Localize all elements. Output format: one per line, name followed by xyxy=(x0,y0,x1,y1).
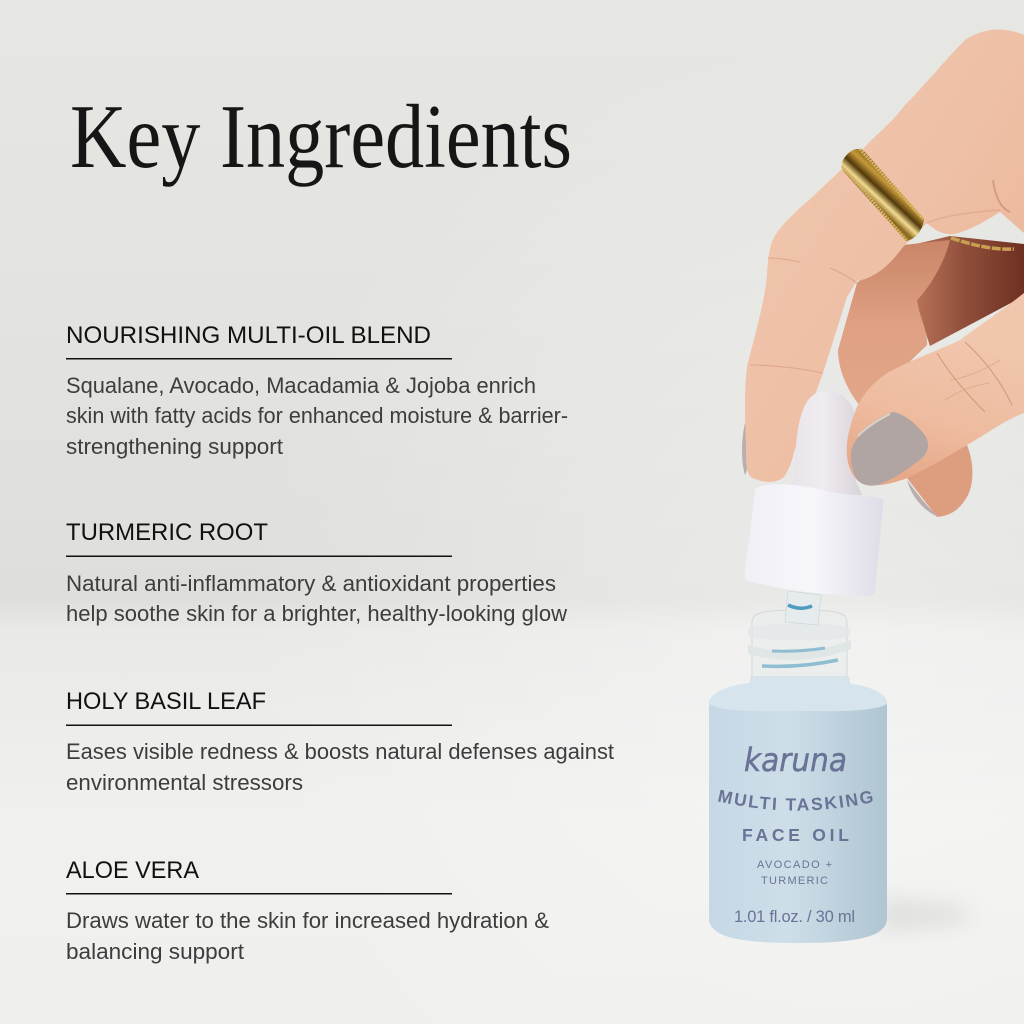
lower finger xyxy=(907,445,972,517)
thumbnail highlight xyxy=(858,414,890,436)
title: Key Ingredients xyxy=(70,86,572,187)
thumb shape xyxy=(847,293,1024,485)
second ring xyxy=(951,238,1014,249)
bottle body xyxy=(709,680,887,943)
dropper tube xyxy=(785,591,821,625)
body: nourishing multi-oil blend xyxy=(66,373,568,459)
dropper bulb xyxy=(782,391,862,495)
brand logo: karuna xyxy=(744,741,847,779)
body: turmeric root: help soothe skin for a brighter, healthy-looking glow xyxy=(66,601,567,626)
heading: turmeric root: TURMERIC ROOT xyxy=(66,519,268,546)
index fingernail xyxy=(742,423,748,475)
body: aloe vera xyxy=(66,908,549,964)
thumb creases xyxy=(937,342,1012,412)
body: nourishing multi-oil blend: strengthening support xyxy=(66,434,283,459)
body: aloe vera: balancing support xyxy=(66,939,244,964)
body: nourishing multi-oil blend: Squalane, Avocado, Macadamia & Jojoba enrich xyxy=(66,373,536,398)
hand: thumb xyxy=(847,293,1024,486)
dropper collar xyxy=(745,484,884,596)
shadowed fingers behind xyxy=(903,236,1024,346)
product bottle xyxy=(709,590,887,943)
section: aloe vera xyxy=(66,857,549,964)
product name: MULTI TASKING xyxy=(718,790,873,811)
heading: holy basil leaf: HOLY BASIL LEAF xyxy=(66,688,266,715)
body: holy basil leaf xyxy=(66,739,614,795)
bottle shadow xyxy=(880,897,975,934)
body: aloe vera: Draws water to the skin for increased hydration & xyxy=(66,908,549,933)
body: holy basil leaf: environmental stressors xyxy=(66,770,303,795)
thumbnail xyxy=(851,412,928,486)
section: nourishing multi-oil blend xyxy=(66,322,568,459)
dropper cap xyxy=(745,391,884,596)
hand: palm and fingers xyxy=(742,30,1024,517)
heading: nourishing multi-oil blend: NOURISHING MULTI-OIL BLEND xyxy=(66,322,431,349)
middle finger xyxy=(838,240,950,408)
body: turmeric root: Natural anti-inflammatory & antioxidant properties xyxy=(66,571,556,596)
product name xyxy=(718,790,873,845)
back of hand and index finger xyxy=(745,30,1024,482)
volume: 1.01 fl.oz. / 30 ml xyxy=(734,908,855,926)
heading: aloe vera: ALOE VERA xyxy=(66,857,200,884)
body: nourishing multi-oil blend: skin with fatty acids for enhanced moisture & barrier- xyxy=(66,403,568,428)
body: turmeric root xyxy=(66,571,567,626)
bottle neck xyxy=(748,610,851,688)
main ring xyxy=(842,149,924,241)
variant: AVOCADO + xyxy=(757,859,832,871)
variant: TURMERIC xyxy=(761,875,828,887)
bottle shoulder highlight xyxy=(709,680,887,711)
body: holy basil leaf: Eases visible redness & boosts natural defenses against xyxy=(66,739,614,764)
variant xyxy=(757,859,832,887)
knuckle creases xyxy=(750,180,1010,373)
lower fingernail xyxy=(907,480,939,517)
product name: FACE OIL xyxy=(742,825,849,845)
section: holy basil leaf xyxy=(66,688,614,795)
section: turmeric root xyxy=(66,519,567,626)
label text xyxy=(718,741,873,926)
gold rings xyxy=(842,149,1014,249)
